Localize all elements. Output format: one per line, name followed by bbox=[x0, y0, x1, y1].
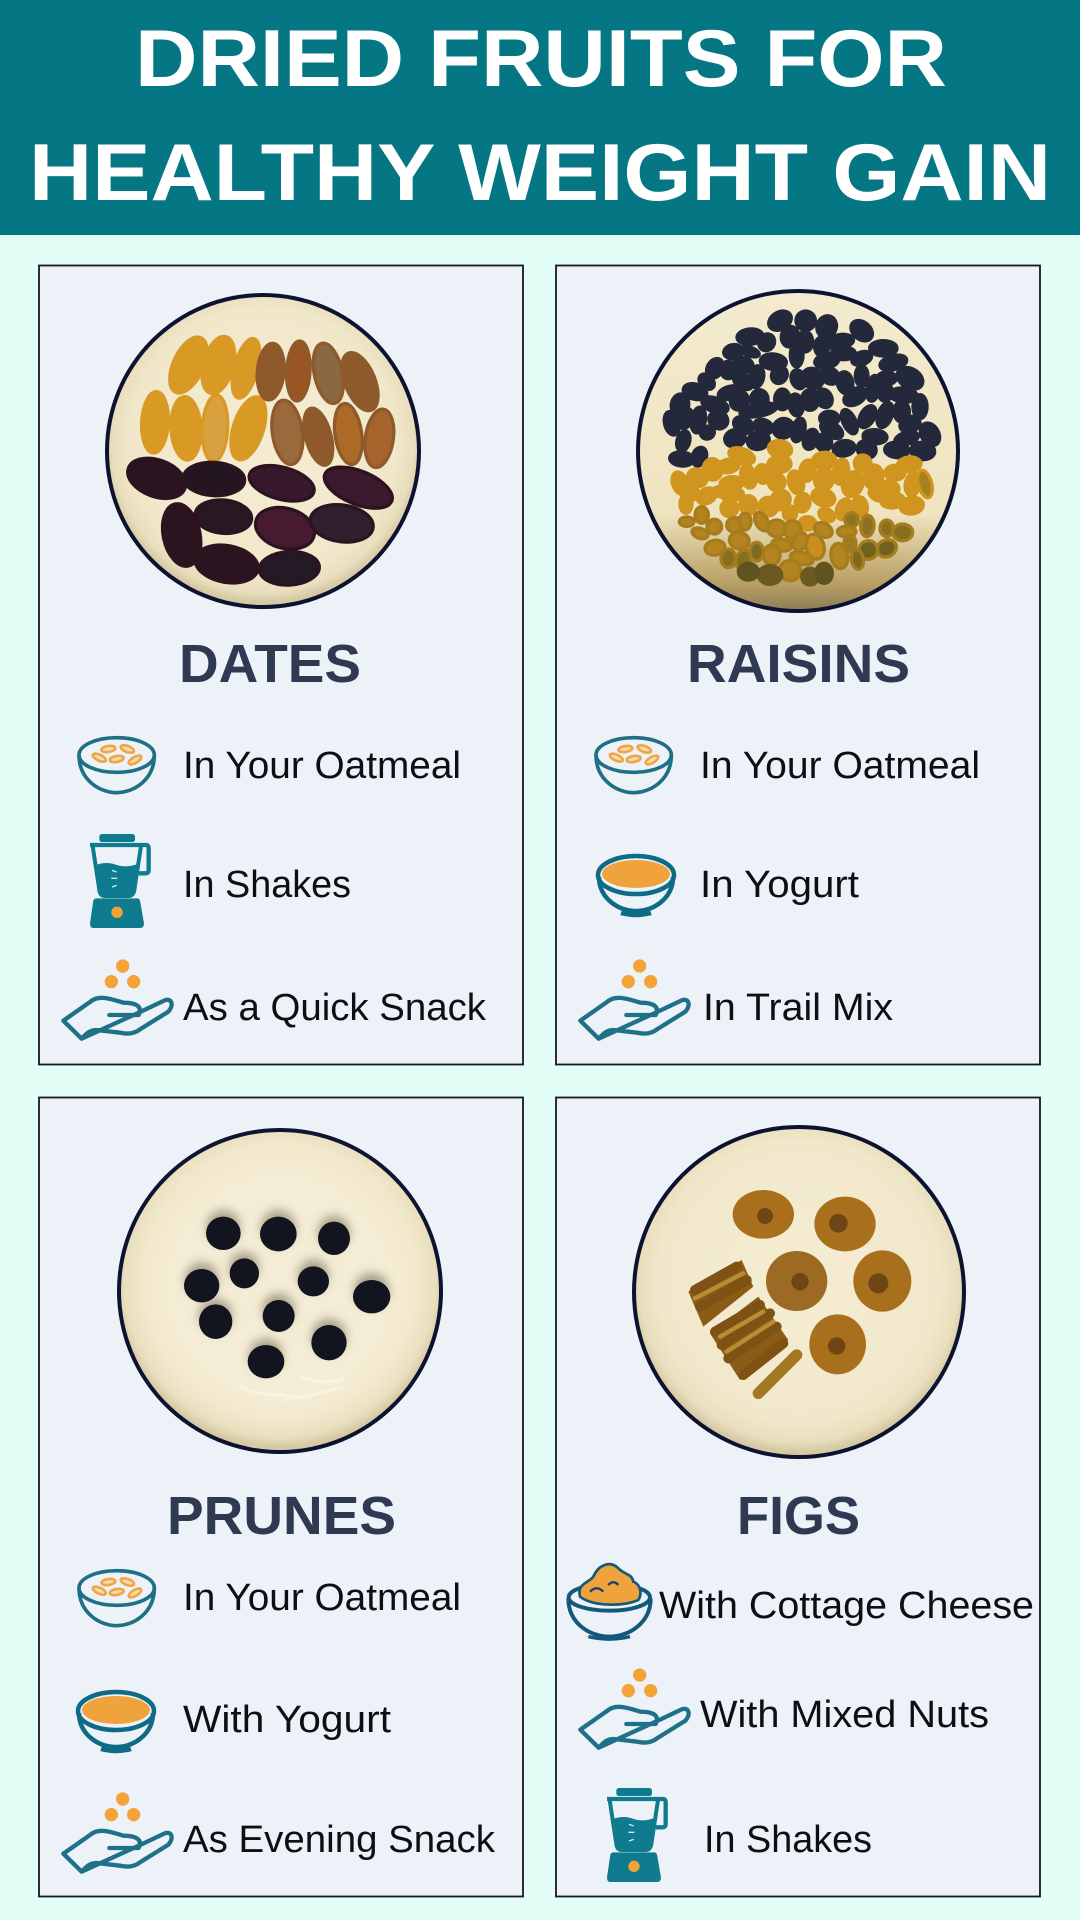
text: in trail mix: In Trail Mix bbox=[703, 987, 893, 1029]
text: in yogurt: In Yogurt bbox=[700, 864, 859, 906]
row: evening snack bbox=[63, 1792, 496, 1872]
icon: hand with nuts bbox=[580, 959, 689, 1039]
icon: oatmeal bowl bbox=[79, 738, 154, 793]
title banner: DRIED FRUITS FOR bbox=[135, 14, 947, 104]
icon: yogurt bowl bbox=[78, 1692, 154, 1751]
text: in your oatmeal: In Your Oatmeal bbox=[183, 1577, 461, 1619]
row: oatmeal bbox=[79, 738, 461, 793]
row: shakes bbox=[90, 834, 351, 928]
panel: dates bbox=[39, 266, 523, 1064]
text: with mixed nuts: With Mixed Nuts bbox=[700, 1694, 989, 1736]
text: with cottage cheese: With Cottage Cheese bbox=[659, 1585, 1034, 1627]
row: shakes bbox=[607, 1788, 872, 1882]
heading: figs: FIGS bbox=[737, 1486, 860, 1546]
icon: oatmeal bowl bbox=[79, 1571, 154, 1626]
row: cottage cheese bbox=[568, 1564, 1034, 1639]
row: oatmeal bbox=[596, 738, 980, 793]
image: plate of raisins bbox=[636, 289, 960, 613]
text: as a quick snack: As a Quick Snack bbox=[183, 987, 487, 1029]
image: plate of figs bbox=[632, 1125, 966, 1459]
heading: raisins: RAISINS bbox=[687, 634, 910, 694]
heading: dates: DATES bbox=[179, 634, 361, 694]
icon: yogurt bowl bbox=[598, 856, 674, 915]
text: in shakes: In Shakes bbox=[704, 1819, 872, 1861]
icon: blender bbox=[607, 1788, 666, 1882]
row: quick snack bbox=[63, 959, 487, 1039]
text: in your oatmeal: In Your Oatmeal bbox=[183, 745, 461, 787]
icon: bowl of cottage cheese bbox=[568, 1564, 651, 1639]
title banner bbox=[0, 0, 1080, 235]
icon: blender bbox=[90, 834, 149, 928]
text: in your oatmeal: In Your Oatmeal bbox=[700, 745, 980, 787]
icon: hand with nuts bbox=[63, 959, 172, 1039]
row: trail mix bbox=[580, 959, 893, 1039]
row: yogurt bbox=[78, 1692, 391, 1751]
image: plate of dates bbox=[105, 293, 421, 609]
panel: figs bbox=[556, 1098, 1040, 1896]
title banner: HEALTHY WEIGHT GAIN bbox=[29, 128, 1051, 218]
heading: prunes: PRUNES bbox=[167, 1486, 396, 1546]
panel: prunes bbox=[39, 1098, 523, 1896]
text: as evening snack: As Evening Snack bbox=[183, 1819, 496, 1861]
row: yogurt bbox=[598, 856, 859, 915]
image: plate of prunes bbox=[117, 1128, 443, 1454]
icon: oatmeal bowl bbox=[596, 738, 671, 793]
row: oatmeal bbox=[79, 1571, 461, 1626]
icon: hand with nuts bbox=[63, 1792, 172, 1872]
panel: raisins bbox=[556, 266, 1040, 1064]
icon: hand with nuts bbox=[580, 1668, 689, 1748]
text: in shakes: In Shakes bbox=[183, 864, 351, 906]
row: mixed nuts bbox=[580, 1668, 989, 1748]
text: with yogurt: With Yogurt bbox=[183, 1699, 391, 1741]
